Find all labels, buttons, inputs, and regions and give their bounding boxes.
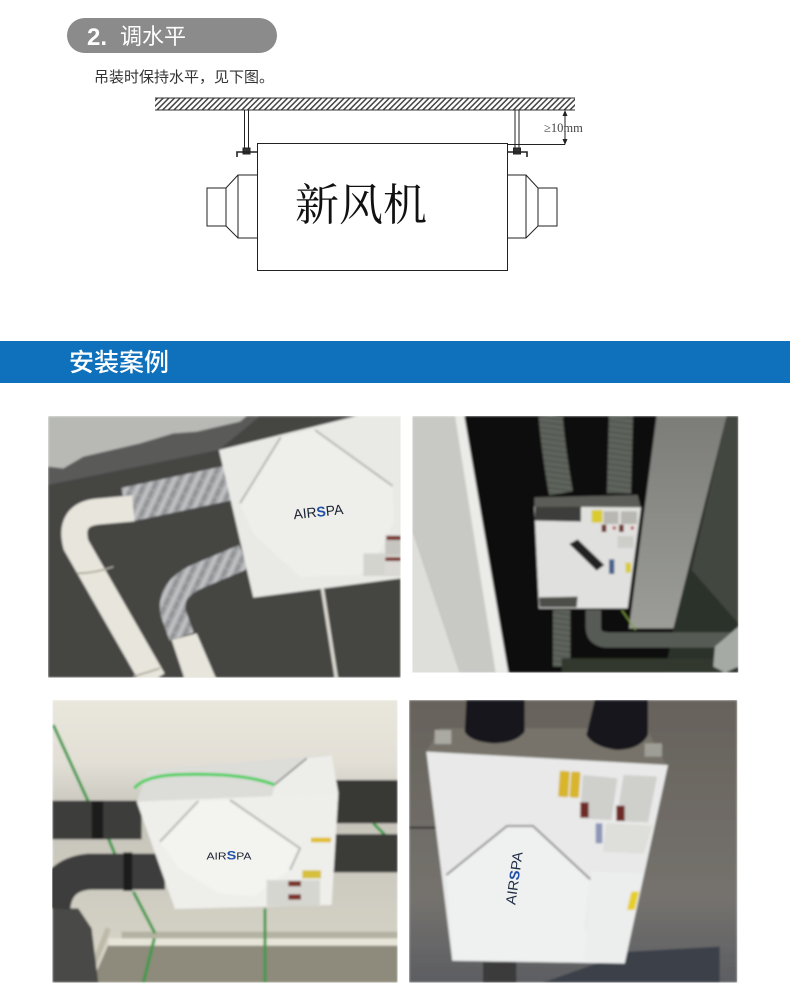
section heading pill: 调水平 xyxy=(67,18,277,53)
unit box xyxy=(258,144,508,270)
clearance dimension: ≥10mm xyxy=(544,121,583,135)
left duct connector xyxy=(207,175,258,238)
right hanger rod and bracket xyxy=(507,110,527,157)
photo: white unit with PVC pipes, top left xyxy=(48,416,401,680)
logo text: AIRSPA xyxy=(206,849,252,863)
section heading pill: 调水平: 2. xyxy=(87,24,107,51)
photo: unit on ceiling with green conduits, bottom left xyxy=(52,700,398,983)
ceiling slab xyxy=(155,98,575,110)
unit label: 新风机 xyxy=(295,181,427,230)
instruction text: 吊装时保持水平，见下图。 xyxy=(94,69,274,86)
right duct connector xyxy=(507,175,557,238)
blue banner: 安装案例: 安装案例 xyxy=(69,349,169,377)
logo text: AIRSPA xyxy=(293,501,345,522)
section heading pill: 调水平: 调水平 xyxy=(120,24,186,49)
photo: unit on concrete ceiling, bottom right xyxy=(409,700,737,983)
left hanger rod and bracket xyxy=(237,110,258,157)
logo text: AIRSPA xyxy=(502,850,526,906)
clearance dimension xyxy=(507,110,583,145)
blue banner: 安装案例 xyxy=(0,341,790,383)
diagram: hanging the fresh air unit level xyxy=(155,98,583,270)
photo: unit between columns, top right xyxy=(412,416,738,673)
